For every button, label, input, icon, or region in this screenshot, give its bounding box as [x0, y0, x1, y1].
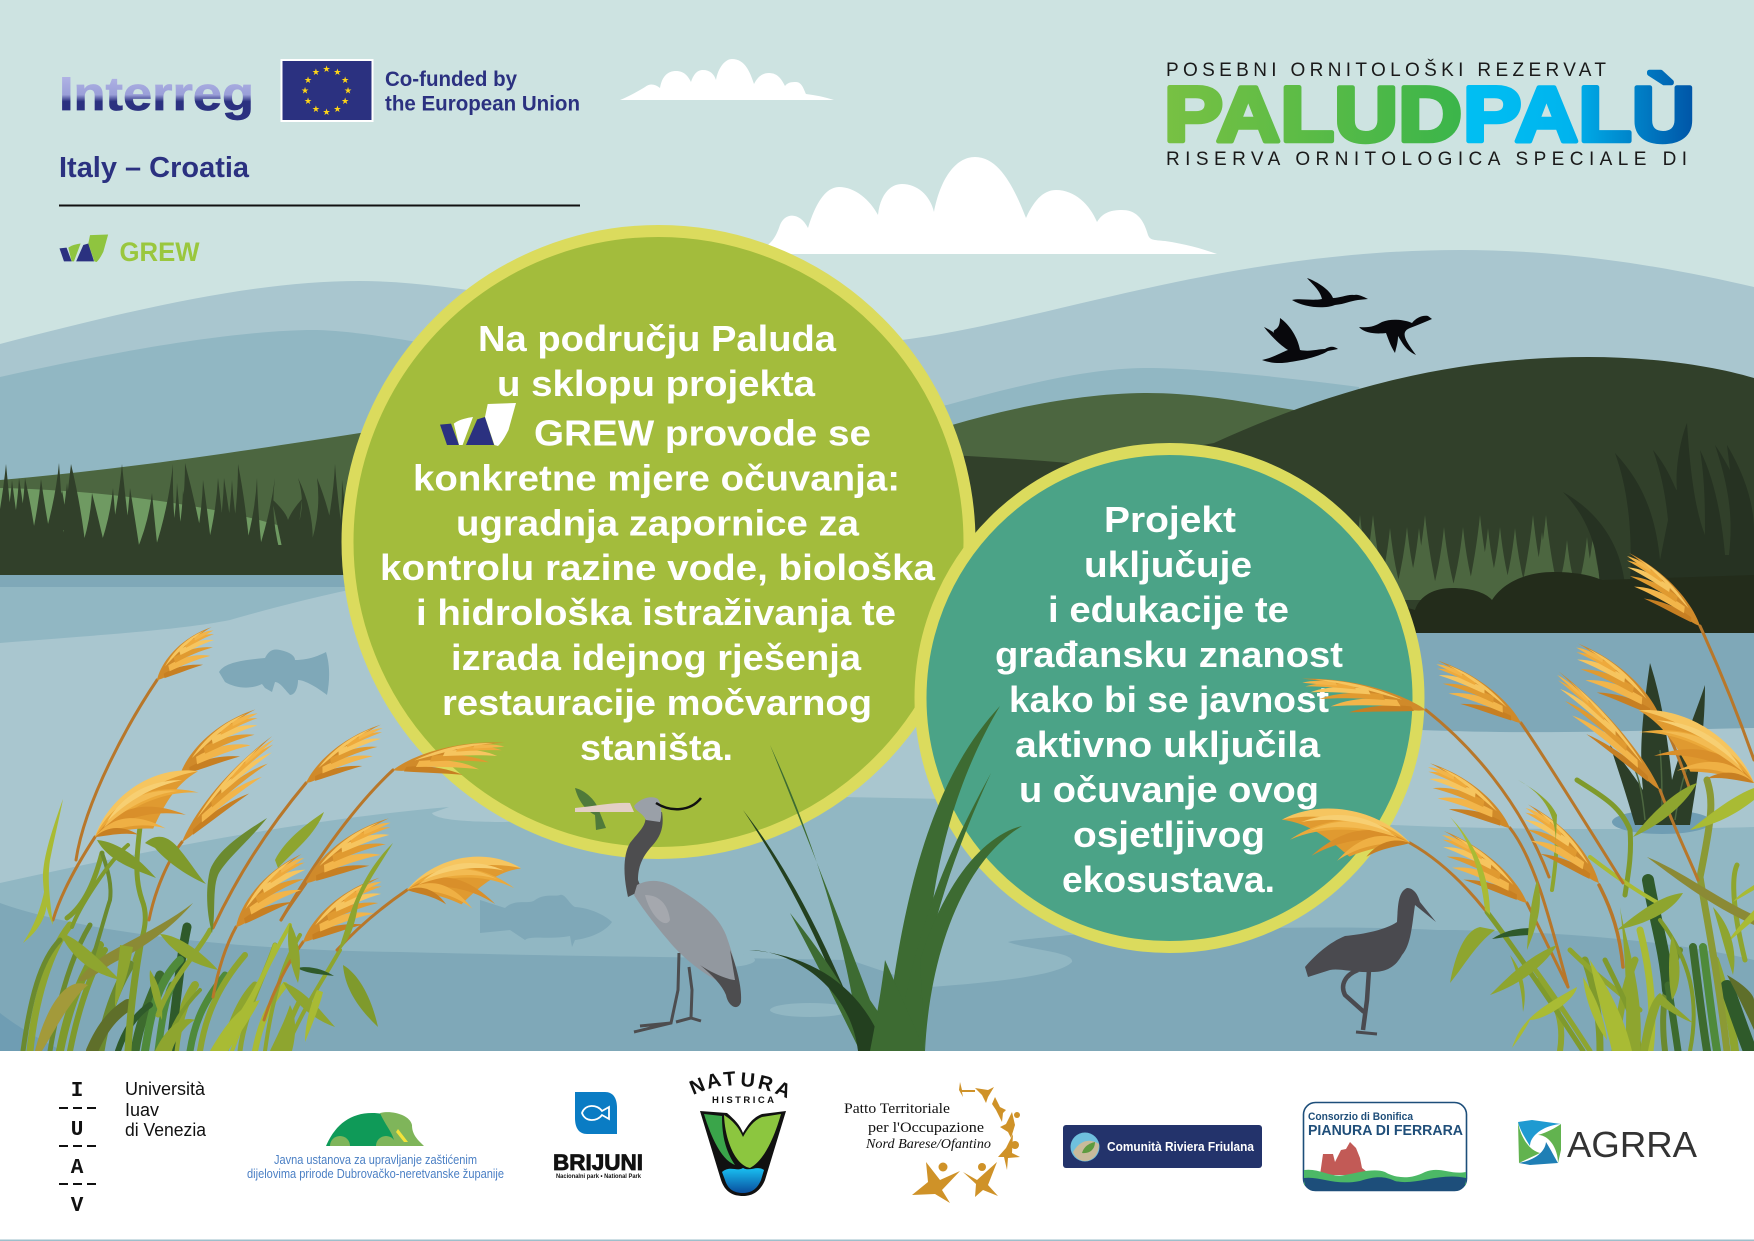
- logo: IUAV: I: [71, 1080, 83, 1103]
- circle text: conservation measures: u sklopu projekta: [497, 363, 816, 404]
- logo: Palud Palù reserve: PALÙ: [1463, 70, 1695, 158]
- logo: Natura Histrica: NATURA: [687, 1068, 794, 1103]
- flag stars: ★: [344, 86, 352, 96]
- fish in beak: [575, 788, 606, 830]
- circle text: education and citizen science: aktivno uključila: [1015, 724, 1321, 765]
- text: co-funded by the European Union: [385, 68, 580, 116]
- flag stars: ★: [323, 64, 331, 74]
- flag stars: ★: [333, 67, 341, 77]
- water with shoreline bands: [0, 575, 1754, 1051]
- logo: Natura Histrica: [687, 1068, 794, 1196]
- logo: Comunità Riviera Friulana: [1063, 1125, 1262, 1168]
- logo: Palud Palù reserve: [1164, 59, 1695, 170]
- circle text: conservation measures: ugradnja zapornice za: [456, 502, 860, 544]
- reed plumes: [1297, 671, 1428, 730]
- logo: Interreg: Interreg: [59, 67, 254, 120]
- flag stars: ★: [304, 96, 312, 106]
- circle text: conservation measures: staništa.: [580, 727, 733, 768]
- logo: Dubrovnik-Neretva protected areas turtle: Javna ustanova za upravljanje zaštićenim: [274, 1153, 477, 1167]
- logo: Natura Histrica: HISTRICA: [712, 1095, 774, 1106]
- reed stems: [53, 680, 407, 1020]
- logo: IUAV: Università: [125, 1079, 206, 1099]
- right water plant: [1610, 663, 1712, 834]
- circle text: education and citizen science: i edukacije te: [1048, 589, 1289, 630]
- panel: green circle: [348, 231, 970, 853]
- logo: GREW: [60, 234, 200, 267]
- left reeds: [23, 621, 525, 1051]
- circle text: conservation measures: kontrolu razine vode, biološka: [380, 547, 936, 588]
- logo: IUAV: A: [71, 1157, 84, 1180]
- circle text: education and citizen science: ekosustava.: [1062, 859, 1275, 900]
- logo: GREW: GREW: [120, 237, 200, 267]
- logo: EU flag: [280, 59, 374, 122]
- reed stems back layer: [23, 827, 340, 1051]
- logo: IUAV: [59, 1079, 207, 1218]
- icon: GREW logo inline: [440, 403, 516, 446]
- right marsh grass and bushes: [1346, 423, 1754, 633]
- flag stars: ★: [304, 75, 312, 85]
- logo: Palud Palù reserve: PALUD: [1164, 70, 1462, 158]
- logo: Brijuni: [553, 1092, 643, 1180]
- circle text: conservation measures: [380, 318, 936, 768]
- logo: Palud Palù reserve: RISERVA ORNITOLOGICA SPECIALE DI: [1166, 149, 1687, 170]
- right reeds: [1278, 547, 1754, 1051]
- reed stems: [1410, 626, 1754, 987]
- circle text: education and citizen science: osjetljivog: [1073, 814, 1265, 855]
- flag stars: ★: [301, 86, 309, 96]
- logo: AGRRA: [1518, 1120, 1697, 1165]
- circle text: education and citizen science: Projekt: [1104, 499, 1236, 540]
- reed stems back layer: [1487, 780, 1750, 1051]
- logo: Comunità Riviera Friulana: Comunità Riviera Friulana: [1107, 1139, 1255, 1154]
- central spiky plant: [743, 706, 1022, 1051]
- text: co-funded by the European Union: Co-funded by: [385, 68, 517, 91]
- header divider: [59, 204, 580, 206]
- flag stars: ★: [312, 67, 320, 77]
- circle text: education and citizen science: u očuvanje ovog: [1019, 769, 1319, 810]
- circle text: education and citizen science: kako bi se javnost: [1009, 679, 1329, 720]
- logo: IUAV: U: [71, 1119, 83, 1142]
- circle text: education and citizen science: građansku znanost: [995, 634, 1343, 675]
- logo: Palud Palù reserve: POSEBNI ORNITOLOŠKI REZERVAT: [1166, 59, 1606, 81]
- logo: Brijuni: BRIJUNI: [553, 1150, 643, 1175]
- flag stars: ★: [312, 104, 320, 114]
- panel: teal circle: [920, 449, 1418, 947]
- flag stars: ★: [341, 75, 349, 85]
- logo: Pianura di Ferrara: PIANURA DI FERRARA: [1308, 1122, 1463, 1139]
- large cloud: [755, 157, 1217, 254]
- logo: IUAV: V: [71, 1195, 84, 1218]
- circle text: conservation measures: restauracije močvarnog: [442, 682, 872, 723]
- circle text: conservation measures: GREW provode se: [534, 412, 871, 454]
- logo: IUAV: di Venezia: [125, 1120, 207, 1140]
- flag stars: ★: [323, 107, 331, 117]
- flag stars: [301, 64, 352, 117]
- reed leaves front layer: [1450, 780, 1754, 1051]
- fish silhouette lower: [480, 895, 612, 947]
- stork silhouette: [1305, 888, 1436, 1034]
- heron body: [634, 881, 740, 1000]
- heron with fish: [575, 788, 741, 1032]
- logo: Brijuni: Nacionalni park • National Park: [556, 1173, 641, 1180]
- logo: Dubrovnik-Neretva protected areas turtle: dijelovima prirode Dubrovačko-neretvanske županije: [247, 1167, 504, 1181]
- flag stars: ★: [333, 104, 341, 114]
- text: co-funded by the European Union: the European Union: [385, 92, 580, 116]
- circle text: conservation measures: Na području Paluda: [478, 318, 837, 359]
- logo: Pianura di Ferrara: [1304, 1102, 1466, 1191]
- fish silhouette upper: [219, 649, 329, 695]
- logo: Patto Territoriale: Patto Territoriale: [844, 1101, 950, 1117]
- logo: Patto Territoriale: per l'Occupazione: [868, 1120, 984, 1136]
- circle text: education and citizen science: [995, 499, 1343, 900]
- left marsh bank with grass: [0, 463, 420, 580]
- circle text: conservation measures: izrada idejnog rješenja: [451, 637, 862, 678]
- reed leaves front layer: [23, 799, 393, 1051]
- text: Italy – Croatia: Italy – Croatia: [59, 152, 250, 184]
- logo: Patto Territoriale: Nord Barese/Ofantino: [865, 1136, 991, 1151]
- small cloud: [620, 59, 834, 100]
- reed plumes: [150, 621, 226, 695]
- heron legs: [634, 953, 701, 1032]
- flag stars: ★: [341, 96, 349, 106]
- logo: Patto Territoriale: [844, 1082, 1020, 1203]
- circle text: conservation measures: konkretne mjere očuvanja:: [413, 458, 900, 498]
- logo: Dubrovnik-Neretva protected areas turtle: [247, 1112, 504, 1181]
- logo: IUAV: Iuav: [125, 1100, 159, 1120]
- logo: Pianura di Ferrara: Consorzio di Bonifica: [1308, 1111, 1414, 1123]
- geese in flight: [1262, 278, 1432, 363]
- landscape hills: [0, 250, 1754, 640]
- circle text: education and citizen science: uključuje: [1084, 544, 1252, 585]
- footer band: [0, 1051, 1754, 1241]
- heron neck and head: [624, 812, 663, 897]
- logo: AGRRA: AGRRA: [1567, 1124, 1697, 1165]
- circle text: conservation measures: i hidrološka istraživanja te: [416, 592, 896, 633]
